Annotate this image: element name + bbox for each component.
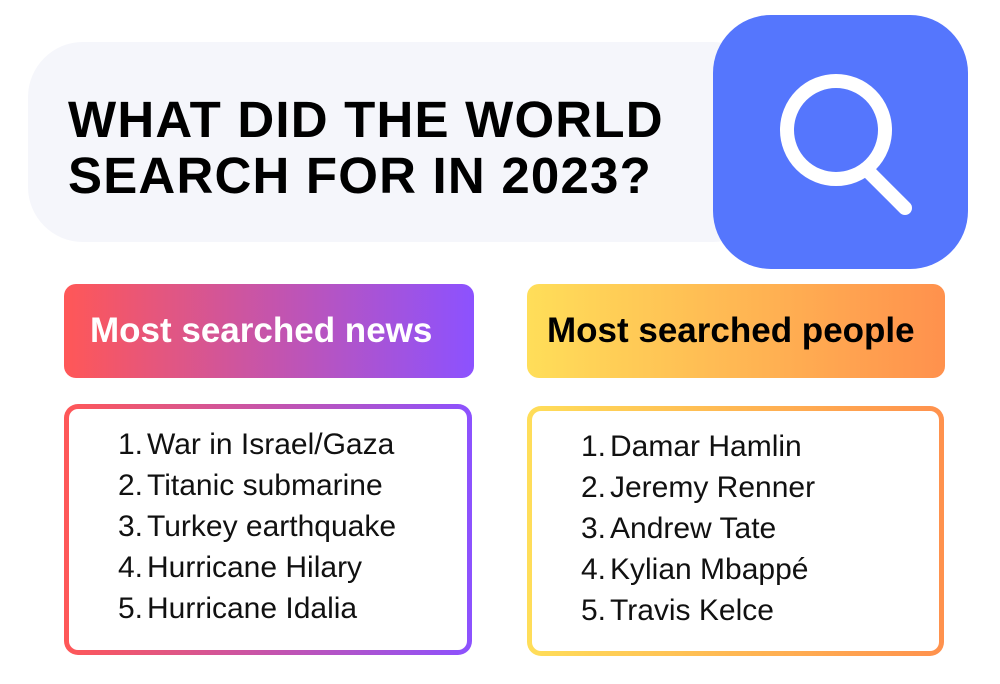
panel: news list: War in Israel/Gaza — [147, 428, 394, 461]
header: news: Most searched news — [90, 311, 432, 350]
panel: people list: Jeremy Renner — [610, 471, 815, 504]
icon: search — [713, 15, 968, 269]
panel: news list: 2. — [118, 469, 143, 502]
panel: news list: 5. — [118, 592, 143, 625]
panel: news list: 3. — [118, 510, 143, 543]
title: SEARCH FOR IN 2023? — [68, 147, 652, 204]
header: news — [64, 284, 474, 378]
title — [68, 91, 664, 204]
title: WHAT DID THE WORLD — [68, 91, 664, 148]
panel: people list: 3. — [581, 512, 606, 545]
panel: people list: Damar Hamlin — [610, 430, 802, 463]
panel: news list: Turkey earthquake — [147, 510, 396, 543]
header: people: Most searched people — [547, 311, 915, 350]
panel: people list: 4. — [581, 553, 606, 586]
panel: people list — [527, 406, 944, 656]
panel: news list: 4. — [118, 551, 143, 584]
panel: news list: Hurricane Hilary — [147, 551, 362, 584]
panel: people list: 5. — [581, 594, 606, 627]
panel: people list: 1. — [581, 430, 606, 463]
panel: news list — [64, 404, 472, 655]
panel: people list: Andrew Tate — [610, 512, 776, 545]
panel: people list: Travis Kelce — [610, 594, 774, 627]
panel: news list: Titanic submarine — [147, 469, 383, 502]
header: people — [527, 284, 945, 378]
panel: people list: 2. — [581, 471, 606, 504]
panel: news list: 1. — [118, 428, 143, 461]
panel: people list: Kylian Mbappé — [610, 553, 808, 586]
title bar — [28, 42, 768, 242]
panel: news list: Hurricane Idalia — [147, 592, 357, 625]
